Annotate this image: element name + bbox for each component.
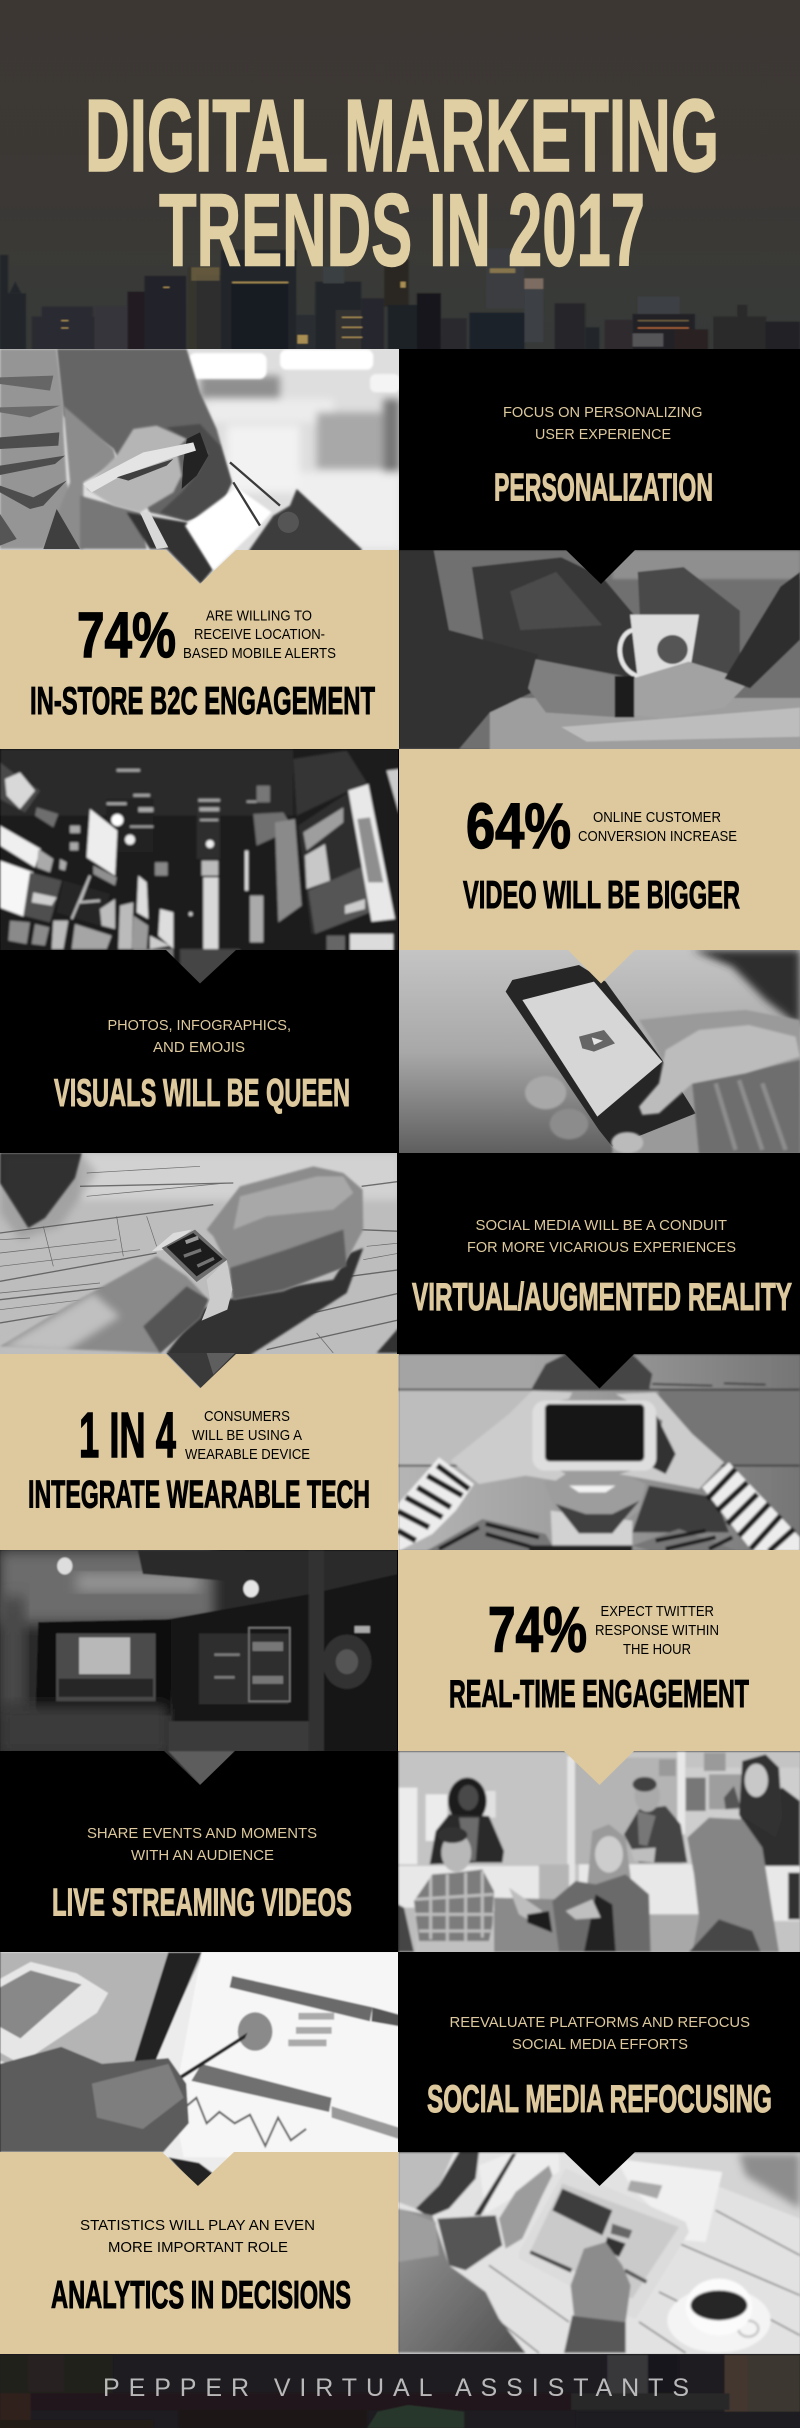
description: FOCUS ON PERSONALIZING	[503, 404, 702, 421]
photo: man wearing vr headset	[398, 1354, 800, 1551]
panel: in-store b2c engagement	[0, 550, 399, 749]
description: FOR MORE VICARIOUS EXPERIENCES	[467, 1239, 736, 1256]
description	[467, 1217, 736, 1256]
description: STATISTICS WILL PLAY AN EVEN	[80, 2217, 315, 2234]
description: ARE WILLING TO	[206, 608, 312, 624]
panel: integrate wearable tech	[0, 1354, 399, 1550]
description: SOCIAL MEDIA WILL BE A CONDUIT	[476, 1217, 727, 1234]
panel: video will be bigger	[399, 749, 800, 984]
title	[88, 98, 716, 268]
panel: live streaming videos	[0, 1751, 399, 1952]
description: ONLINE CUSTOMER	[593, 809, 721, 826]
description	[503, 404, 702, 443]
description: THE HOUR	[623, 1641, 691, 1658]
description: AND EMOJIS	[153, 1039, 245, 1056]
lit windows	[61, 267, 689, 347]
panel: social media refocusing	[398, 1952, 800, 2186]
description: RECEIVE LOCATION-	[194, 626, 325, 643]
photo: smartphone video in hand	[398, 950, 800, 1154]
description: RESPONSE WITHIN	[595, 1622, 719, 1639]
heading: IN-STORE B2C ENGAGEMENT	[30, 680, 375, 723]
skyline silhouette	[0, 248, 800, 350]
panel: virtual/augmented reality	[397, 1153, 800, 1388]
stat: 64%	[466, 790, 571, 862]
photo: coffee mug and tablet	[399, 550, 800, 751]
photo: smart watch with arrow	[0, 1153, 400, 1393]
photo: analytics dashboard with arrow	[0, 1948, 403, 2191]
description: EXPECT TWITTER	[600, 1603, 714, 1620]
stat: 74%	[77, 599, 176, 671]
photo: tablet and coffee on a table	[398, 2152, 800, 2355]
photo: video camera with arrow	[0, 1550, 398, 1788]
description	[185, 1408, 310, 1463]
stat: 1 IN 4	[79, 1399, 176, 1471]
photo: team meeting	[398, 1751, 800, 1954]
footer with city backdrop	[0, 2354, 800, 2428]
description	[80, 2217, 315, 2256]
description: PHOTOS, INFOGRAPHICS,	[108, 1017, 291, 1034]
description	[183, 608, 336, 662]
description: CONSUMERS	[204, 1408, 290, 1425]
heading: VISUALS WILL BE QUEEN	[54, 1072, 350, 1115]
panel: real-time engagement	[398, 1550, 800, 1785]
header panel with city skyline	[0, 0, 800, 350]
description	[578, 809, 737, 845]
description: WEARABLE DEVICE	[185, 1446, 310, 1463]
description	[595, 1603, 719, 1658]
description: REEVALUATE PLATFORMS AND REFOCUS	[450, 2014, 750, 2031]
panel: analytics in decisions	[0, 2152, 399, 2354]
heading: ANALYTICS IN DECISIONS	[51, 2274, 351, 2317]
description: USER EXPERIENCE	[535, 426, 671, 443]
photo: person holding a phone with arrow	[0, 349, 400, 586]
panel: personalization	[399, 349, 800, 584]
description: SOCIAL MEDIA EFFORTS	[512, 2036, 688, 2053]
brand name: PEPPER VIRTUAL ASSISTANTS	[103, 2374, 689, 2402]
description: CONVERSION INCREASE	[578, 828, 737, 845]
photo: city billboards with arrow	[0, 749, 400, 986]
description	[87, 1825, 317, 1864]
description: BASED MOBILE ALERTS	[183, 645, 336, 662]
heading: INTEGRATE WEARABLE TECH	[28, 1474, 370, 1516]
description	[450, 2014, 750, 2053]
stat: 74%	[488, 1594, 587, 1666]
description: WILL BE USING A	[192, 1427, 302, 1444]
panel: visuals will be queen	[0, 950, 399, 1153]
description: MORE IMPORTANT ROLE	[108, 2239, 288, 2256]
description	[108, 1017, 291, 1056]
description: WITH AN AUDIENCE	[131, 1847, 274, 1864]
heading: LIVE STREAMING VIDEOS	[52, 1882, 352, 1924]
description: SHARE EVENTS AND MOMENTS	[87, 1825, 317, 1842]
